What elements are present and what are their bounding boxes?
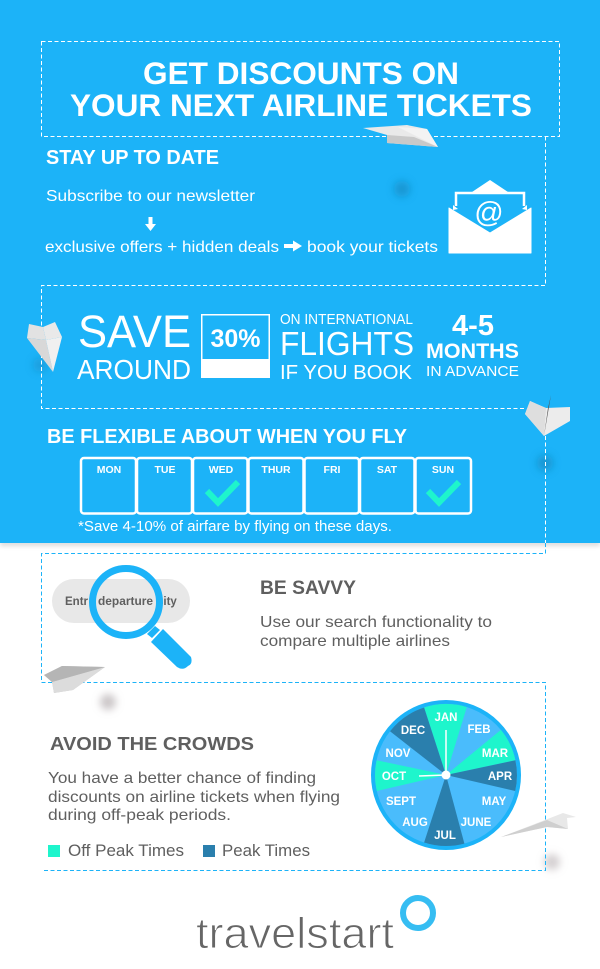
legend — [48, 842, 310, 860]
calendar footnote: *Save 4-10% of airfare by flying on these days. — [78, 519, 392, 535]
month wheel chart: DEC — [401, 725, 425, 737]
arrow: right — [284, 240, 302, 252]
section: be savvy: compare multiple airlines — [260, 633, 450, 650]
search illustration — [52, 568, 192, 669]
section: stay up to date: book your tickets — [307, 239, 438, 256]
legend: Off Peak Times — [68, 842, 184, 860]
arrow: down — [145, 217, 156, 231]
search illustration: sity — [157, 596, 177, 608]
section: avoid the crowds: discounts on airline tickets when flying — [48, 789, 340, 806]
section: save around: 4-5 — [452, 310, 494, 342]
weekly calendar: MON — [97, 464, 121, 476]
section: stay up to date: Subscribe to our newsletter — [46, 188, 256, 205]
section: stay up to date: STAY UP TO DATE — [46, 147, 219, 169]
weekly calendar — [81, 458, 471, 514]
icon: check marks — [207, 482, 459, 502]
month wheel chart — [373, 702, 519, 848]
icon: paper plane top — [363, 125, 438, 147]
section: stay up to date: exclusive offers + hidden deals — [45, 239, 279, 256]
panel: blue background — [0, 0, 600, 546]
icon: paper plane right — [525, 395, 570, 436]
icon: paper plane left — [27, 322, 62, 372]
weekly calendar: SAT — [377, 464, 398, 476]
month wheel chart: JAN — [434, 712, 458, 724]
section: save around: SAVE — [78, 306, 191, 357]
weekly calendar: SUN — [432, 464, 454, 476]
month wheel chart: OCT — [382, 771, 406, 783]
section: save around: FLIGHTS — [280, 325, 414, 362]
section: be savvy: Use our search functionality to — [260, 614, 492, 631]
logo: travelstart: travelstart — [196, 909, 394, 958]
percent box: 30% — [210, 325, 261, 353]
weekly calendar: WED — [209, 464, 234, 476]
heading: be flexible: BE FLEXIBLE ABOUT WHEN YOU FLY — [47, 426, 408, 448]
month wheel chart: MAR — [482, 748, 509, 760]
weekly calendar: FRI — [324, 464, 341, 476]
weekly calendar: THUR — [261, 464, 291, 476]
section: avoid the crowds: You have a better chance of finding — [48, 770, 316, 787]
section: avoid the crowds — [48, 733, 340, 824]
search illustration: Entr — [65, 596, 89, 608]
section: be savvy — [260, 578, 492, 650]
month wheel chart: MAY — [482, 796, 507, 808]
section: stay up to date — [45, 147, 438, 256]
section: be savvy: BE SAVVY — [260, 578, 356, 599]
icon: paper plane bottom right — [501, 813, 576, 837]
icon: email envelope: @ — [474, 197, 504, 229]
section: save around: ON INTERNATIONAL — [280, 312, 413, 328]
month wheel chart: NOV — [386, 748, 411, 760]
weekly calendar: TUE — [154, 464, 176, 476]
month wheel chart: FEB — [468, 724, 490, 736]
month wheel chart: APR — [488, 771, 513, 783]
dashed flight path — [42, 42, 560, 870]
icon: magnifying glass — [92, 568, 192, 669]
icon: paper plane bottom left — [44, 666, 105, 693]
title: GET DISCOUNTS ON — [143, 55, 459, 91]
search illustration: departure — [98, 596, 153, 608]
section: save around — [77, 306, 519, 385]
section: save around: AROUND — [77, 354, 191, 385]
section: avoid the crowds: during off-peak periods. — [48, 807, 231, 824]
section: avoid the crowds: AVOID THE CROWDS — [50, 733, 254, 754]
logo: travelstart — [196, 898, 433, 958]
legend: Peak Times — [222, 842, 310, 860]
title: YOUR NEXT AIRLINE TICKETS — [70, 87, 532, 123]
shadow spots — [33, 181, 560, 870]
month wheel chart: SEPT — [386, 796, 416, 808]
month wheel chart: JUL — [434, 830, 456, 842]
clock hands — [419, 730, 450, 780]
section: save around: IF YOU BOOK — [280, 362, 413, 384]
icon: email envelope — [449, 180, 531, 253]
section: save around: MONTHS — [426, 340, 519, 363]
month wheel chart: JUNE — [461, 817, 492, 829]
section: save around: IN ADVANCE — [426, 363, 519, 380]
title — [70, 55, 532, 123]
percent box — [201, 315, 270, 378]
month wheel chart: AUG — [402, 817, 428, 829]
